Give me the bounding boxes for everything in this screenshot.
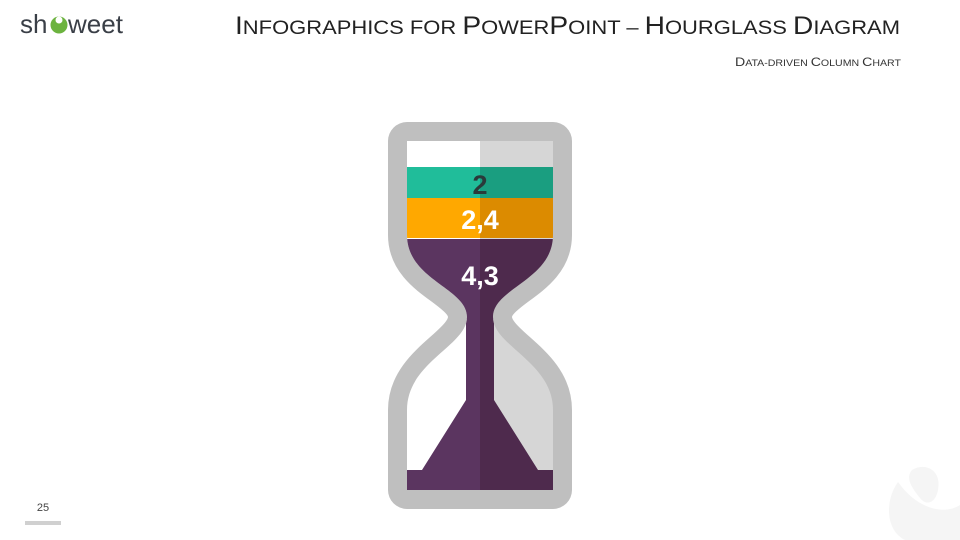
subtitle: DATA-DRIVEN COLUMN CHART: [735, 55, 902, 69]
label: 2,4: 2,4: [461, 205, 499, 235]
decorative logo mark: [889, 467, 960, 540]
page number: 25: [37, 502, 49, 514]
title: INFOGRAPHICS FOR POWER POINT – HOURGLASS DIAGRAM: [235, 12, 900, 40]
band: teal 2: [400, 167, 560, 198]
label: 2: 2: [472, 170, 488, 200]
band: orange 2,4: [400, 198, 560, 238]
band: purple 4,3: [400, 239, 560, 490]
label: 4,3: 4,3: [461, 261, 499, 291]
hourglass chart: [400, 130, 560, 500]
logo: weet: [67, 9, 124, 39]
page number: [25, 502, 61, 525]
logo: [20, 9, 124, 39]
logo: sh: [20, 9, 47, 39]
